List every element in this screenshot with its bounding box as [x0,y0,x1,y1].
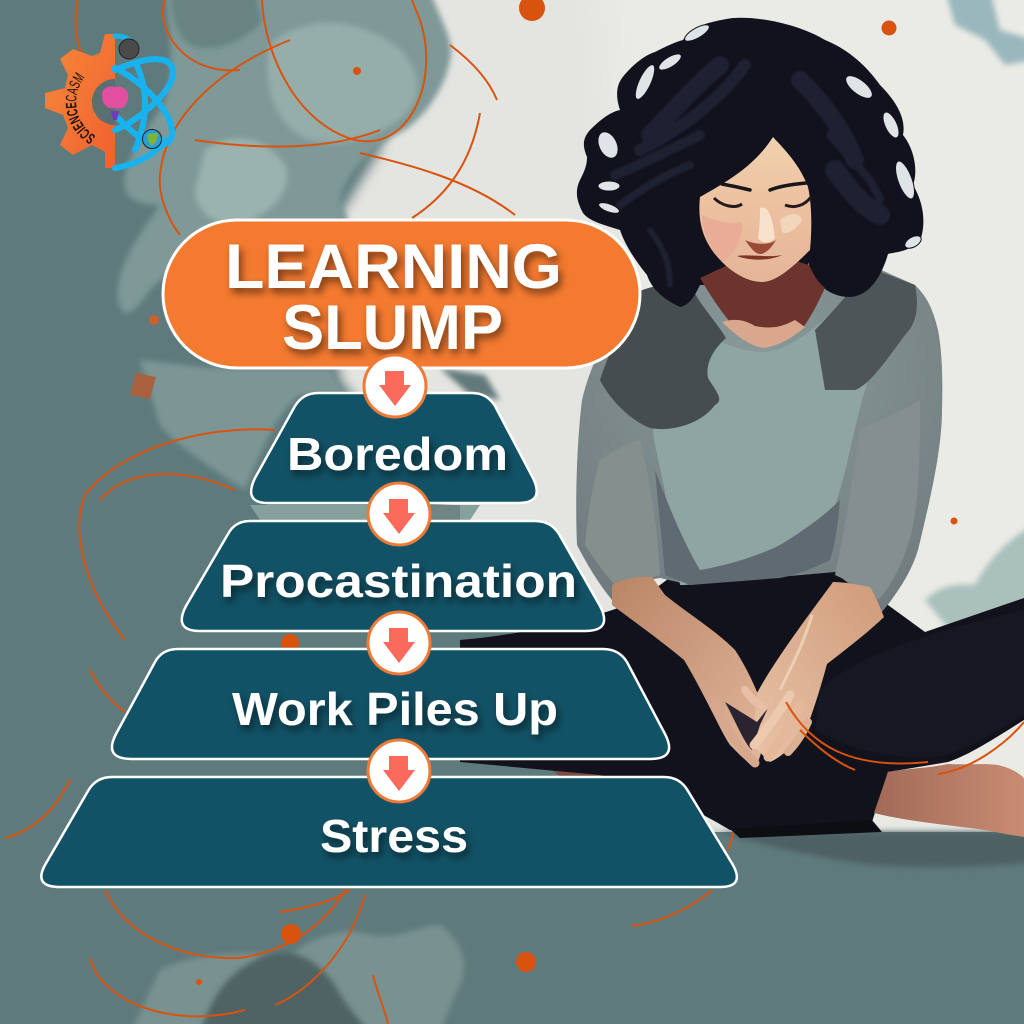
gaps in the curls [594,22,923,251]
arrow badge 2 [368,483,430,545]
finger gaps [725,702,768,750]
legs [460,570,1024,831]
skin behind the pyramid [540,762,640,778]
neck [700,250,832,348]
logo wordmark: SCIENCECASM [66,72,95,144]
tier 4: Stress [41,777,737,887]
tier 1: Boredom: Boredom [287,428,508,480]
tier 2: Procastination [182,521,604,631]
icon: brain [102,86,128,109]
icon: moon [119,39,139,59]
face [699,137,811,282]
title text: SLUMP [282,293,503,363]
paint dots [130,0,958,985]
fingers [715,690,808,763]
arrow badge 1 [364,355,426,417]
icon: bulb [111,111,119,120]
hair [577,18,923,307]
logo: Sciencecasm [45,34,176,171]
sweater [576,265,942,612]
title text [225,232,562,363]
arrow badge 3 [368,612,430,674]
icon: half gear [45,34,115,168]
icon: atom orbits [115,36,173,168]
tier 2: Procastination: Procastination [220,555,577,607]
collar skin [722,320,805,348]
woman illustration [460,18,1024,838]
foot [874,764,1024,837]
tier 4: Stress: Stress [320,810,468,862]
title pill: Learning Slump [163,220,640,368]
tier 1: Boredom [251,393,537,503]
left arm and hand [612,577,770,766]
hair over neck [680,250,850,307]
tier 3: Work Piles Up: Work Piles Up [232,683,558,735]
icon: gear hole [92,79,115,125]
icon: globe [142,130,162,148]
right arm and hand [752,582,884,762]
arrow badge 4 [368,740,430,802]
floor shadow [730,820,882,838]
orange lines over the woman [786,702,1024,774]
hair strands [615,65,880,285]
leg shading [815,610,1024,758]
title text: LEARNING [225,232,562,302]
tier 3: Work Piles Up [112,649,669,759]
orange scribble lines behind [5,0,737,1024]
